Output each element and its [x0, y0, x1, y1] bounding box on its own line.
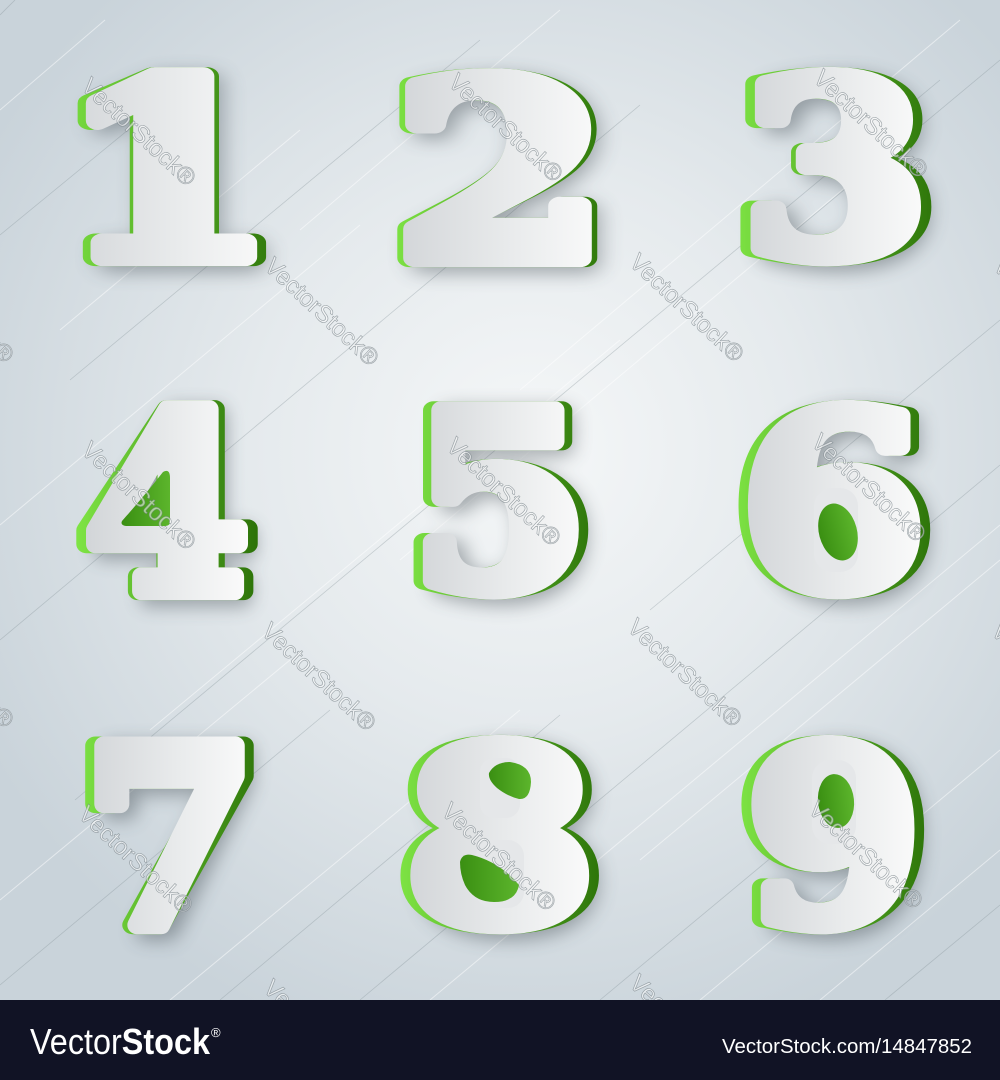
watermarks: VectorStock®	[256, 618, 381, 737]
digit 1: 1	[49, 29, 287, 315]
digit 9: 9	[747, 697, 921, 979]
digit 3: 3	[731, 29, 939, 311]
watermarks: VectorStock®	[436, 798, 561, 917]
digit 7: 7	[74, 694, 266, 983]
digit 9: 9	[737, 697, 931, 979]
hole: digit 9	[815, 772, 857, 830]
digit 1: 1	[59, 29, 277, 315]
digit 7: 7	[84, 695, 256, 984]
footer bar	[0, 1000, 1000, 1080]
digit 2: 2	[402, 37, 616, 322]
digit 9: 9	[755, 703, 929, 985]
watermarks: VectorStock®	[441, 433, 566, 552]
footer logo: VectorStock	[30, 1021, 211, 1062]
watermarks: VectorStock®	[76, 437, 201, 556]
watermarks: VectorStock®	[624, 249, 749, 368]
digit 5: 5	[411, 360, 589, 645]
digit 6: 6	[731, 363, 935, 644]
digit 5: 5	[401, 361, 599, 645]
hole: digit 4	[122, 471, 170, 526]
digit 4: 4	[85, 362, 249, 649]
footer registered mark: ®	[211, 1025, 221, 1040]
watermarks: VectorStock®	[259, 253, 384, 372]
watermarks: VectorStock®	[803, 796, 928, 915]
digit 4: 4	[93, 368, 257, 655]
digit 8: 8	[406, 698, 594, 979]
hole: digit 8 upper	[489, 762, 531, 799]
digit 8: 8	[415, 704, 602, 985]
digit 4: 4	[75, 361, 259, 649]
watermarks: VectorStock®	[443, 69, 568, 188]
digit 3: 3	[751, 34, 937, 317]
hole: digit 6	[812, 499, 864, 565]
watermarks: VectorStock®	[76, 73, 201, 192]
digit 5: 5	[420, 366, 597, 651]
digit 6: 6	[741, 362, 925, 644]
watermarks: VectorStock®	[622, 614, 747, 733]
watermarks: VectorStock®	[808, 65, 933, 184]
footer image id: VectorStock.com/14847852	[722, 1036, 972, 1058]
watermarks: VectorStock®	[73, 801, 198, 920]
digit 8: 8	[396, 697, 604, 979]
digit 7: 7	[92, 701, 264, 990]
digit 1: 1	[67, 35, 284, 321]
digit 2: 2	[388, 29, 614, 316]
digit 2: 2	[394, 30, 608, 316]
watermarks: VectorStock®	[806, 429, 931, 548]
digit 6: 6	[750, 368, 934, 650]
hole: digit 8 lower	[460, 855, 519, 902]
digit 3: 3	[742, 28, 928, 311]
